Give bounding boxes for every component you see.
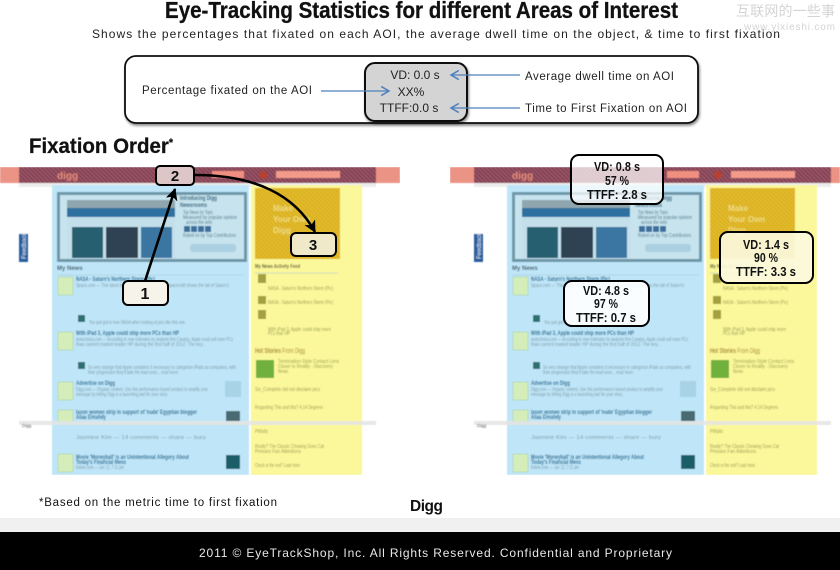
right web page screenshot: Aliaa Elmahdy: [531, 414, 561, 421]
right web page screenshot: Presses Fan Attentions: [710, 449, 756, 455]
right web page screenshot: Top News by Topic: [638, 210, 668, 216]
right web page screenshot: Really? The Classic Chowing Goes Cat: [710, 444, 779, 450]
stat callout: main news area: 97 %: [594, 296, 618, 311]
left web page screenshot: So very strange that Apple considers it necessary to categorize iPads as computers, with: [88, 365, 236, 371]
right web page screenshot: Iason women strip in support of 'nude' Egyptian blogger: [531, 409, 652, 416]
watermark: 互联网的一些事: [736, 1, 835, 21]
left web page screenshot: Top News by Topic: [183, 210, 213, 216]
legend label: TTFF: Time to First Fixation on AOI: [525, 103, 687, 115]
footnote: *Based on the metric time to first fixation: [39, 497, 277, 509]
left web page screenshot: News: [278, 369, 288, 375]
legend label: percentage: Percentage fixated on the AOI: [142, 85, 312, 97]
legend sample box: XX%: [398, 85, 425, 99]
right web page screenshot: NASA - Saturn's Northern Storm (Pic): [531, 276, 610, 283]
left web page screenshot: digg: [57, 171, 78, 182]
right web page screenshot: Jasmine Kim — 14 comments — share — bury: [531, 435, 662, 441]
watermark: www.yixieshi.com: [743, 22, 835, 33]
right web page screenshot: Check or the rest? Load more: [710, 463, 755, 469]
left web page screenshot: Your Own: [273, 215, 310, 224]
right web page screenshot: Your Own: [728, 215, 765, 224]
stat callout: sidebar area: [720, 232, 813, 283]
left web page screenshot: My News Activity Feed: [255, 264, 300, 270]
left web page screenshot: Pitfalls: [255, 429, 268, 435]
right web page screenshot: Termination-Style Contact Lens: [733, 359, 794, 365]
stat callout: header area: [571, 155, 663, 204]
right web page screenshot: message by letting Digg is a launching pad for your story.: [531, 392, 623, 398]
left web page screenshot: Digg.com — Organic content. Use this performance based product to amplify your: [76, 387, 208, 393]
right web page screenshot: With iPad 3, Apple could ship more: [723, 327, 786, 333]
stat callout: sidebar area: 90 %: [754, 250, 778, 265]
footer band: 2011 © EyeTrackShop, Inc. All Rights Reserved. Confidential and Proprietary: [199, 546, 672, 560]
left web page screenshot: message by letting Digg is a launching pad for your story.: [76, 392, 168, 398]
legend arrow: dwell: [451, 74, 520, 76]
left web page screenshot: Six_Complete did not disclaim pics: [255, 387, 320, 393]
left web page screenshot: Make: [273, 204, 294, 213]
stat callout: sidebar area: VD: 1.4 s: [743, 237, 789, 252]
legend sample box: TTFF:0.0 s: [380, 101, 438, 115]
left web page screenshot: With iPad 3, Apple could ship more: [268, 327, 331, 333]
right web page screenshot: across the web: [641, 220, 667, 226]
right web page screenshot: NASA - Saturn's Northern Storm (Pic): [723, 286, 788, 292]
left web page screenshot: NASA - Saturn's Northern Storm (Pic): [76, 276, 155, 283]
left web page screenshot: Newsrooms: [180, 202, 207, 209]
fixation marker 1: [123, 281, 168, 305]
legend panel: [125, 56, 698, 123]
right web page screenshot: Pitfalls: [710, 429, 723, 435]
right web page screenshot: Digg.com — Organic content. Use this performance based product to amplify your: [531, 387, 663, 393]
right web page screenshot: Movie 'Moneyball' is an Unintentional Allegory About: [531, 454, 645, 461]
right web page screenshot: [450, 167, 840, 475]
fixation marker 2: [156, 166, 194, 185]
left web page screenshot: My News: [57, 266, 83, 272]
right web page screenshot: their progression they'll take the lead soon... read more: [543, 370, 633, 376]
right web page screenshot: Space.com — This latest image from NASA's Cassini spacecraft shows the tail of Saturn's: [531, 283, 684, 289]
watermark: [736, 1, 835, 33]
left web page screenshot: arstechnica.com — According to new estimates by analysts firm Canalys, Apple could sell more PCs: [76, 337, 233, 343]
left web page screenshot: With iPad 3, Apple could ship more PCs than HP: [76, 330, 179, 337]
legend arrow: TTFF: [451, 107, 520, 109]
left web page screenshot: Advertise on Digg: [76, 380, 115, 387]
left web page screenshot: Feedback: [22, 232, 28, 259]
right web page screenshot: digg: [512, 171, 533, 182]
left web page screenshot: Closer to Reality - Discovery: [278, 364, 333, 370]
label: Digg: Digg: [410, 498, 443, 515]
left web page screenshot: Measured by popular opinion: [183, 215, 237, 221]
left web page screenshot: Presses Fan Attentions: [255, 449, 301, 455]
right web page screenshot: You just got to love NASA when looking at pics like this one.: [544, 320, 641, 326]
subtitle: Shows the percentages that fixated on each AOI, the average dwell time on the object, & time to first fixation: [92, 27, 780, 41]
left web page screenshot: NASA - Saturn's Northern Storm (Pic): [268, 286, 333, 292]
fixation marker 1: 1: [141, 286, 150, 303]
right web page screenshot: Rated on by Top Contributors: [638, 233, 691, 239]
right web page screenshot: Introducing Digg: [635, 195, 672, 202]
left web page screenshot: Space.com — This latest image from NASA's Cassini spacecraft shows the tail of Saturn's: [76, 283, 229, 289]
left web page screenshot: Digg: [273, 226, 291, 235]
legend label: dwell: Average dwell time on AOI: [525, 71, 674, 83]
right web page screenshot: Hot Stories From Digg: [710, 348, 760, 355]
left web page screenshot: Digg: [22, 423, 32, 428]
left web page screenshot: Movie 'Moneyball' is an Unintentional Allegory About: [76, 454, 190, 461]
right web page screenshot: forbes.com — Jun 12, 7:11 pm: [531, 465, 579, 471]
left web page screenshot: PCs than HP: [268, 331, 290, 337]
left web page screenshot: forbes.com — Jun 12, 7:11 pm: [76, 465, 124, 471]
right web page screenshot: Feedback: [477, 232, 483, 259]
right web page screenshot: Regarding This and this? 4.14 Degrees: [710, 405, 778, 411]
right web page screenshot: PCs than HP: [723, 331, 745, 337]
left web page screenshot: Aliaa Elmahdy: [76, 414, 106, 421]
fixation marker 2: 2: [171, 168, 179, 185]
left web page screenshot: Rated on by Top Contributors: [183, 233, 236, 239]
right web page screenshot: My News: [512, 266, 538, 272]
right web page screenshot: Make: [728, 204, 749, 213]
left web page screenshot: Today's Financial Mess: [76, 459, 126, 466]
left web page screenshot: than current market leader HP during the first half of 2012. The key...: [76, 342, 206, 348]
left web page screenshot: Jasmine Kim — 14 comments — share — bury: [76, 435, 207, 441]
left web page screenshot: across the web: [186, 220, 212, 226]
left web page screenshot: Termination-Style Contact Lens: [278, 359, 339, 365]
legend arrow: percentage: [321, 90, 389, 92]
stat callout: main news area: VD: 4.8 s: [583, 283, 629, 298]
right web page screenshot: Advertise on Digg: [531, 380, 570, 387]
stat callout: header area: TTFF: 2.8 s: [587, 187, 647, 202]
right web page screenshot: than current market leader HP during the first half of 2012. The key...: [531, 342, 661, 348]
right web page screenshot: Closer to Reality - Discovery: [733, 364, 788, 370]
stat callout: main news area: [564, 281, 649, 326]
legend sample box: VD: 0.0 s: [390, 68, 440, 82]
left web page screenshot: [0, 167, 400, 475]
stat callout: header area: 57 %: [605, 173, 629, 188]
legend sample box: [365, 63, 467, 121]
left web page screenshot: Hot Stories From Digg: [255, 348, 305, 355]
right web page screenshot: With iPad 3, Apple could ship more PCs than HP: [531, 330, 634, 337]
left web page screenshot: Regarding This and this? 4.14 Degrees: [255, 405, 323, 411]
left web page screenshot: their progression they'll take the lead soon... read more: [88, 370, 178, 376]
right web page screenshot: My News Activity Feed: [710, 264, 755, 270]
right web page screenshot: Digg: [728, 226, 746, 235]
stat callout: header area: VD: 0.8 s: [594, 159, 640, 174]
right web page screenshot: Digg: [477, 423, 487, 428]
left web page screenshot: Check or the rest? Load more: [255, 463, 300, 469]
fixation arrow 2 to 3: [195, 175, 315, 232]
right web page screenshot: Six_Complete did not disclaim pics: [710, 387, 775, 393]
heading: fixation order: *: [169, 137, 174, 149]
left web page screenshot: NASA - Saturn's Northern Storm (Pic): [268, 300, 333, 306]
left web page screenshot: Iason women strip in support of 'nude' Egyptian blogger: [76, 409, 197, 416]
right web page screenshot: News: [733, 369, 743, 375]
fixation marker 3: [291, 233, 336, 256]
right web page screenshot: Today's Financial Mess: [531, 459, 581, 466]
stat callout: sidebar area: TTFF: 3.3 s: [736, 264, 796, 279]
left web page screenshot: Introducing Digg: [180, 195, 217, 202]
footer band: [0, 518, 840, 570]
fixation marker 3: 3: [309, 237, 317, 254]
left web page screenshot: Really? The Classic Chowing Goes Cat: [255, 444, 324, 450]
right web page screenshot: Newsrooms: [635, 202, 662, 209]
right web page screenshot: Measured by popular opinion: [638, 215, 692, 221]
left web page screenshot: You just got to love NASA when looking at pics like this one.: [89, 320, 186, 326]
right web page screenshot: arstechnica.com — According to new estimates by analysts firm Canalys, Apple could sell more PCs: [531, 337, 688, 343]
right web page screenshot: So very strange that Apple considers it necessary to categorize iPads as computers, with: [543, 365, 691, 371]
fixation arrow 1 to 2: [145, 189, 175, 281]
stat callout: main news area: TTFF: 0.7 s: [576, 310, 636, 325]
right web page screenshot: NASA - Saturn's Northern Storm (Pic): [723, 300, 788, 306]
heading: fixation order: Fixation Order: [29, 135, 173, 158]
